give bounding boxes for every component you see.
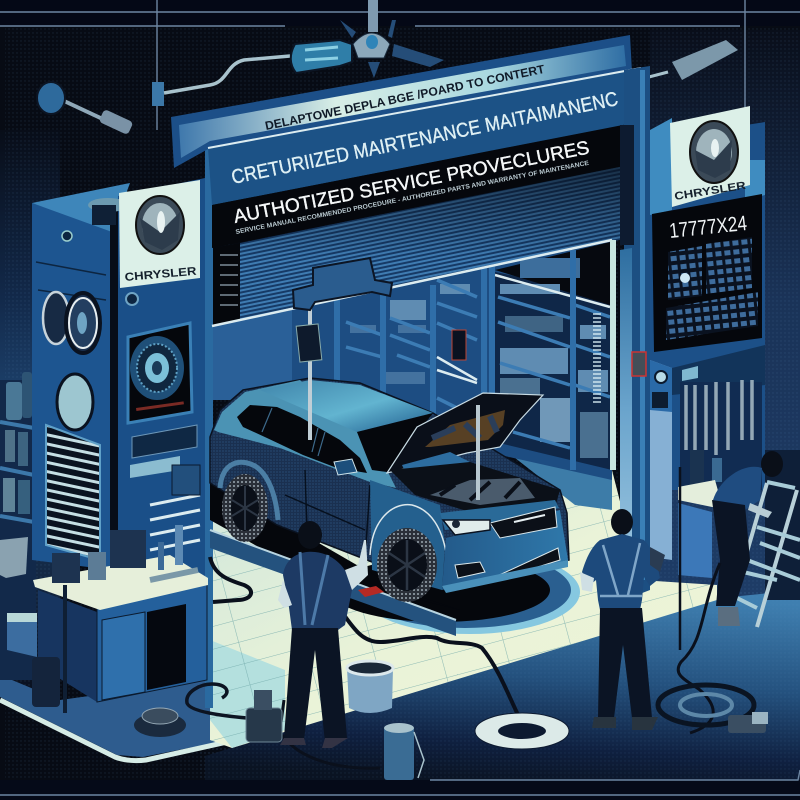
logo sign left: [119, 180, 200, 288]
right logo sign: [670, 106, 750, 207]
blue maintenance sign: [208, 68, 641, 205]
car body: [210, 378, 569, 587]
water spray: [593, 313, 601, 403]
bench top: [33, 555, 208, 610]
oil bucket: [347, 661, 393, 713]
work bench: [32, 525, 208, 713]
rear fender arch: [220, 462, 278, 520]
right door column: [610, 66, 650, 600]
logo caption: CHRYSLER: [124, 266, 198, 284]
left machine tower: [32, 178, 205, 590]
workshop interior with shelves: [290, 240, 612, 480]
right machine tower: [632, 106, 765, 578]
gauge pair: [43, 292, 100, 353]
control buttons: [130, 425, 200, 550]
lower grille: [495, 548, 560, 580]
door lines: [285, 470, 370, 545]
dial display screen: [128, 323, 192, 423]
engine bay: [390, 462, 560, 512]
grille: [490, 507, 557, 538]
front wheel: [377, 528, 437, 602]
rear stage floor: [200, 590, 800, 780]
open hood: [387, 393, 543, 473]
left stock shelves: [0, 372, 37, 680]
car windows: [237, 405, 367, 473]
left door column: [205, 148, 292, 708]
table base: [678, 503, 712, 578]
windscreen shadow: [357, 413, 433, 472]
worker at car wheel: [278, 521, 368, 748]
headlight: [443, 520, 490, 535]
right work table: [678, 480, 722, 508]
band small print: SERVICE MANUAL RECOMMENDED PROCEDURE - AUTHORIZED PARTS AND WARRANTY OF MAINTENANCE: [235, 160, 590, 236]
hood side panel: [370, 480, 445, 590]
bumper: [442, 510, 568, 590]
round dial: [57, 374, 93, 430]
machine behind ladder: [765, 450, 800, 600]
canister vacuum: [384, 723, 424, 780]
parts at coil: [728, 712, 768, 733]
car roof: [260, 380, 433, 432]
floor ring drain: [475, 713, 569, 749]
lift posts: [293, 258, 480, 500]
roller shutter: [212, 165, 624, 326]
right logo caption: CHRYSLER: [674, 180, 747, 203]
floor hoses: [210, 467, 754, 768]
sign heading: CRETURIIZED MAIRTENANCE MAITAIMANENC: [230, 88, 620, 189]
tower front panel: [118, 178, 205, 590]
floor part on platform: [134, 708, 186, 737]
band heading: AUTHOTIZED SERVICE PROVECLURES: [232, 138, 591, 228]
overhead light sign panel: [171, 35, 632, 168]
compressor beside worker: [246, 690, 282, 742]
SUV: [210, 378, 569, 602]
left floor and platform: [0, 675, 290, 761]
right data display: [652, 194, 762, 352]
display number: 17777X24: [668, 212, 748, 243]
right bent worker: [712, 451, 783, 626]
ventilation grille: [46, 425, 100, 560]
worker standing at right: [580, 509, 665, 730]
ladder: [737, 482, 800, 627]
hood nose: [440, 500, 559, 530]
tiled floor: [210, 440, 717, 748]
right tool cabinet: [632, 345, 765, 560]
tower side panel: [32, 203, 112, 570]
black service procedures band: [212, 124, 628, 248]
car shadow and halo: [210, 480, 580, 634]
lift rails: [210, 530, 456, 636]
ceiling pipes and fan: [37, 0, 738, 135]
top sign text: DELAPTOWE DEPLA BGE /POARD TO CONTERT: [264, 62, 546, 133]
car greenhouse: [214, 380, 396, 488]
rear wheel: [222, 474, 268, 542]
coil hose by bench: [187, 684, 247, 718]
bottom frame: [0, 770, 800, 800]
bench side louvres: [38, 590, 97, 702]
door mirror: [334, 459, 357, 475]
front fender arch: [370, 505, 446, 555]
